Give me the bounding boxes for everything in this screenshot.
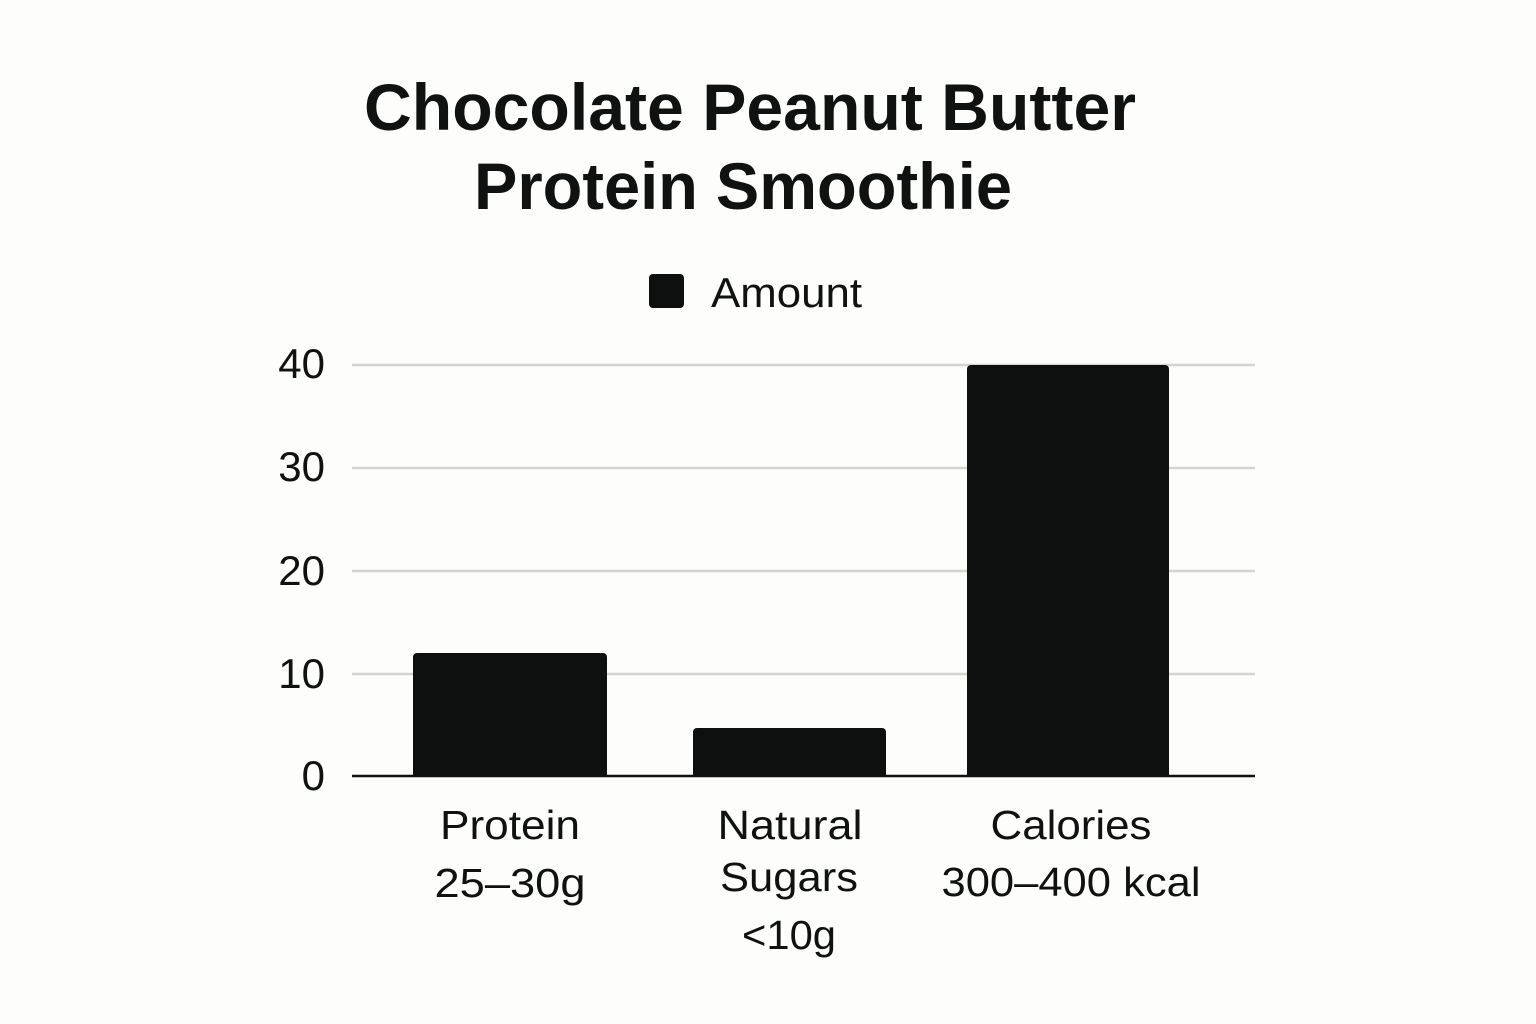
category label: calories: Calories <box>990 802 1152 848</box>
category label: calories: 300–400 kcal <box>942 859 1200 905</box>
y axis labels: 30 <box>278 443 325 490</box>
category label: natural sugars: Sugars <box>720 854 858 900</box>
x axis baseline <box>352 775 1255 777</box>
category label: protein: 25–30g <box>434 860 586 906</box>
y axis labels: 0 <box>302 752 325 799</box>
bar: protein <box>413 653 607 776</box>
y axis labels: 10 <box>278 650 325 697</box>
y axis gridlines <box>352 365 1255 674</box>
y axis labels <box>278 340 325 799</box>
legend: Amount <box>711 269 862 316</box>
y axis labels: 40 <box>278 340 325 387</box>
category label: natural sugars <box>718 802 862 958</box>
bar chart <box>278 340 1255 958</box>
title: Protein Smoothie <box>474 149 1012 223</box>
category label: calories <box>942 802 1200 905</box>
legend <box>649 269 862 316</box>
category label: natural sugars: Natural <box>718 802 862 848</box>
category label: protein: Protein <box>440 802 580 848</box>
bar: natural sugars <box>693 728 886 776</box>
y axis labels: 20 <box>278 547 325 594</box>
category label: protein <box>434 802 586 906</box>
category label: natural sugars: <10g <box>742 912 836 958</box>
bar: calories <box>967 365 1169 776</box>
title <box>364 70 1136 223</box>
title: Chocolate Peanut Butter <box>364 70 1136 144</box>
